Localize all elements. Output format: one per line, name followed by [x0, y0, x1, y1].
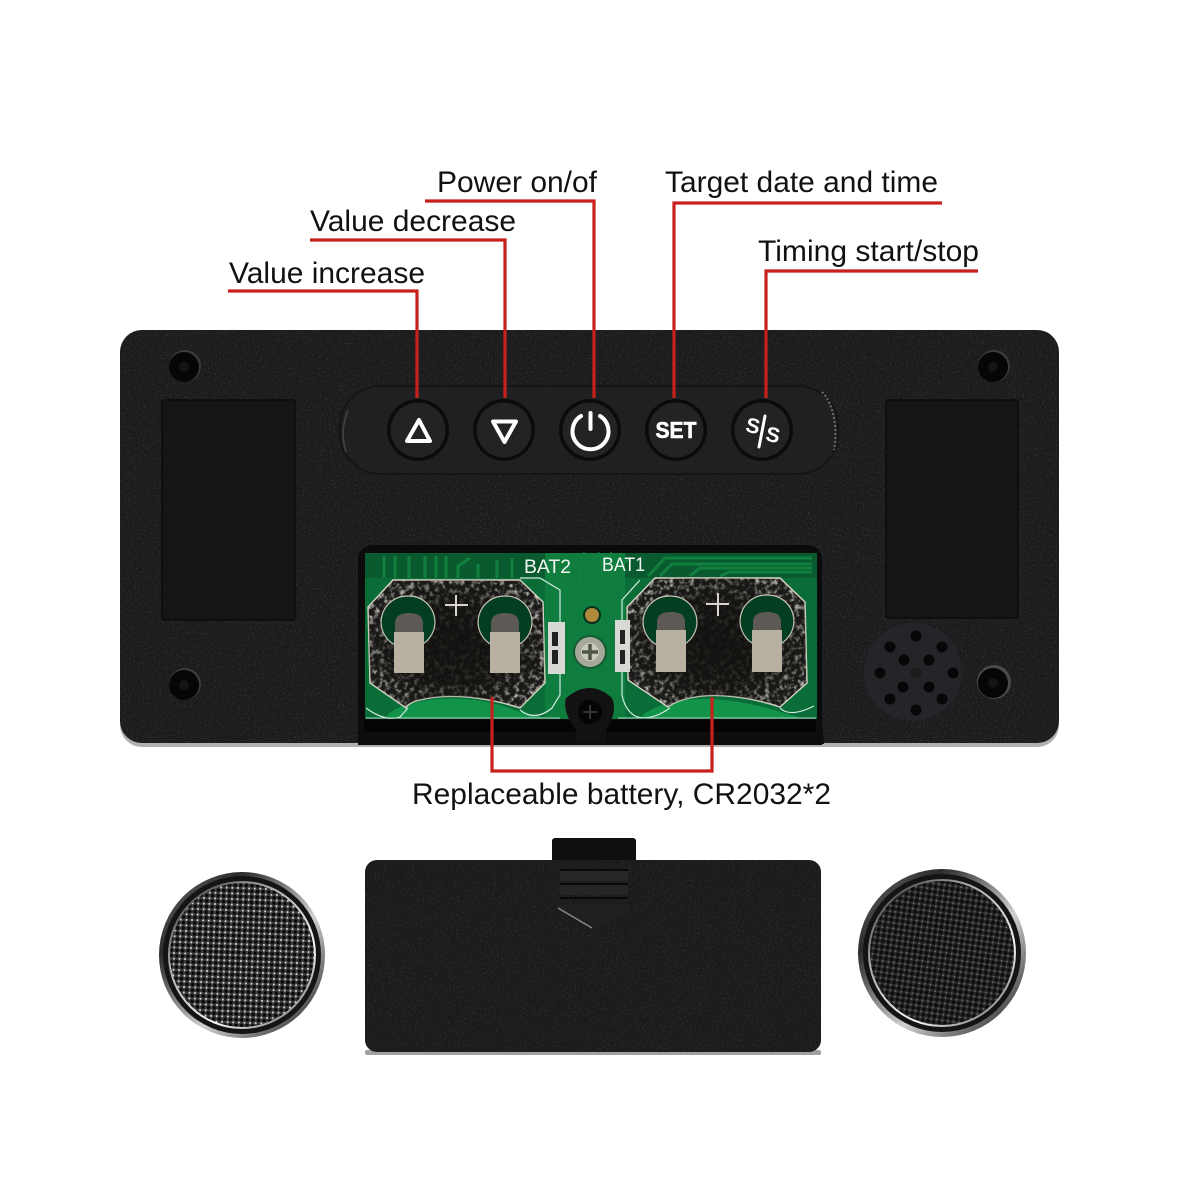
screw top right [978, 350, 1010, 382]
button: value increase [387, 399, 449, 461]
board screw [573, 635, 607, 669]
screw bottom right [977, 665, 1011, 699]
callout: replaceable battery: Replaceable battery, CR2032*2 [412, 778, 831, 811]
callout: power on/off: Power on/of [437, 166, 598, 199]
lower pads [385, 698, 545, 718]
button: start/stop: S [764, 423, 782, 448]
board solder pad [583, 606, 601, 624]
cover arrow grip [558, 870, 629, 928]
callout: value increase: Value increase [229, 257, 425, 290]
button: start/stop: S [744, 414, 762, 439]
right rubber pad [886, 400, 1018, 618]
circuit board [365, 553, 817, 719]
button strip [340, 386, 838, 474]
callout: replaceable battery [412, 697, 831, 811]
device back panel [120, 330, 1059, 747]
screw top left [169, 350, 201, 382]
silkscreen outlines [366, 578, 560, 718]
button: power [559, 399, 621, 461]
button: value decrease [473, 399, 535, 461]
retaining post [565, 688, 614, 743]
cover tab [552, 838, 636, 864]
callout: timing start/stop: Timing start/stop [758, 235, 979, 268]
callout: power on/off [425, 166, 598, 398]
BAT1 label: BAT1 [602, 555, 645, 576]
coin cell left [159, 872, 325, 1038]
callout: target date and time: Target date and time [665, 166, 938, 199]
screw bottom left [169, 668, 201, 700]
coin cell right [858, 869, 1026, 1037]
button: SET: SET [656, 417, 696, 443]
callout: target date and time [665, 166, 942, 398]
button: SET [645, 399, 707, 461]
battery holder BAT1 [625, 576, 809, 709]
battery compartment [358, 545, 824, 745]
BAT2 label: BAT2 [524, 557, 571, 578]
board traces [384, 553, 812, 590]
callout: value decrease [310, 205, 516, 398]
callout: value increase [228, 257, 425, 398]
battery cover [365, 838, 821, 1055]
battery holder BAT2 [365, 578, 547, 710]
callout: value decrease: Value decrease [310, 205, 516, 238]
speaker grille [864, 623, 962, 721]
compartment lower lip [358, 722, 824, 744]
button: start/stop [731, 399, 793, 461]
callout: timing start/stop [758, 235, 979, 398]
left rubber pad [162, 400, 295, 620]
holder side contacts [548, 620, 630, 674]
